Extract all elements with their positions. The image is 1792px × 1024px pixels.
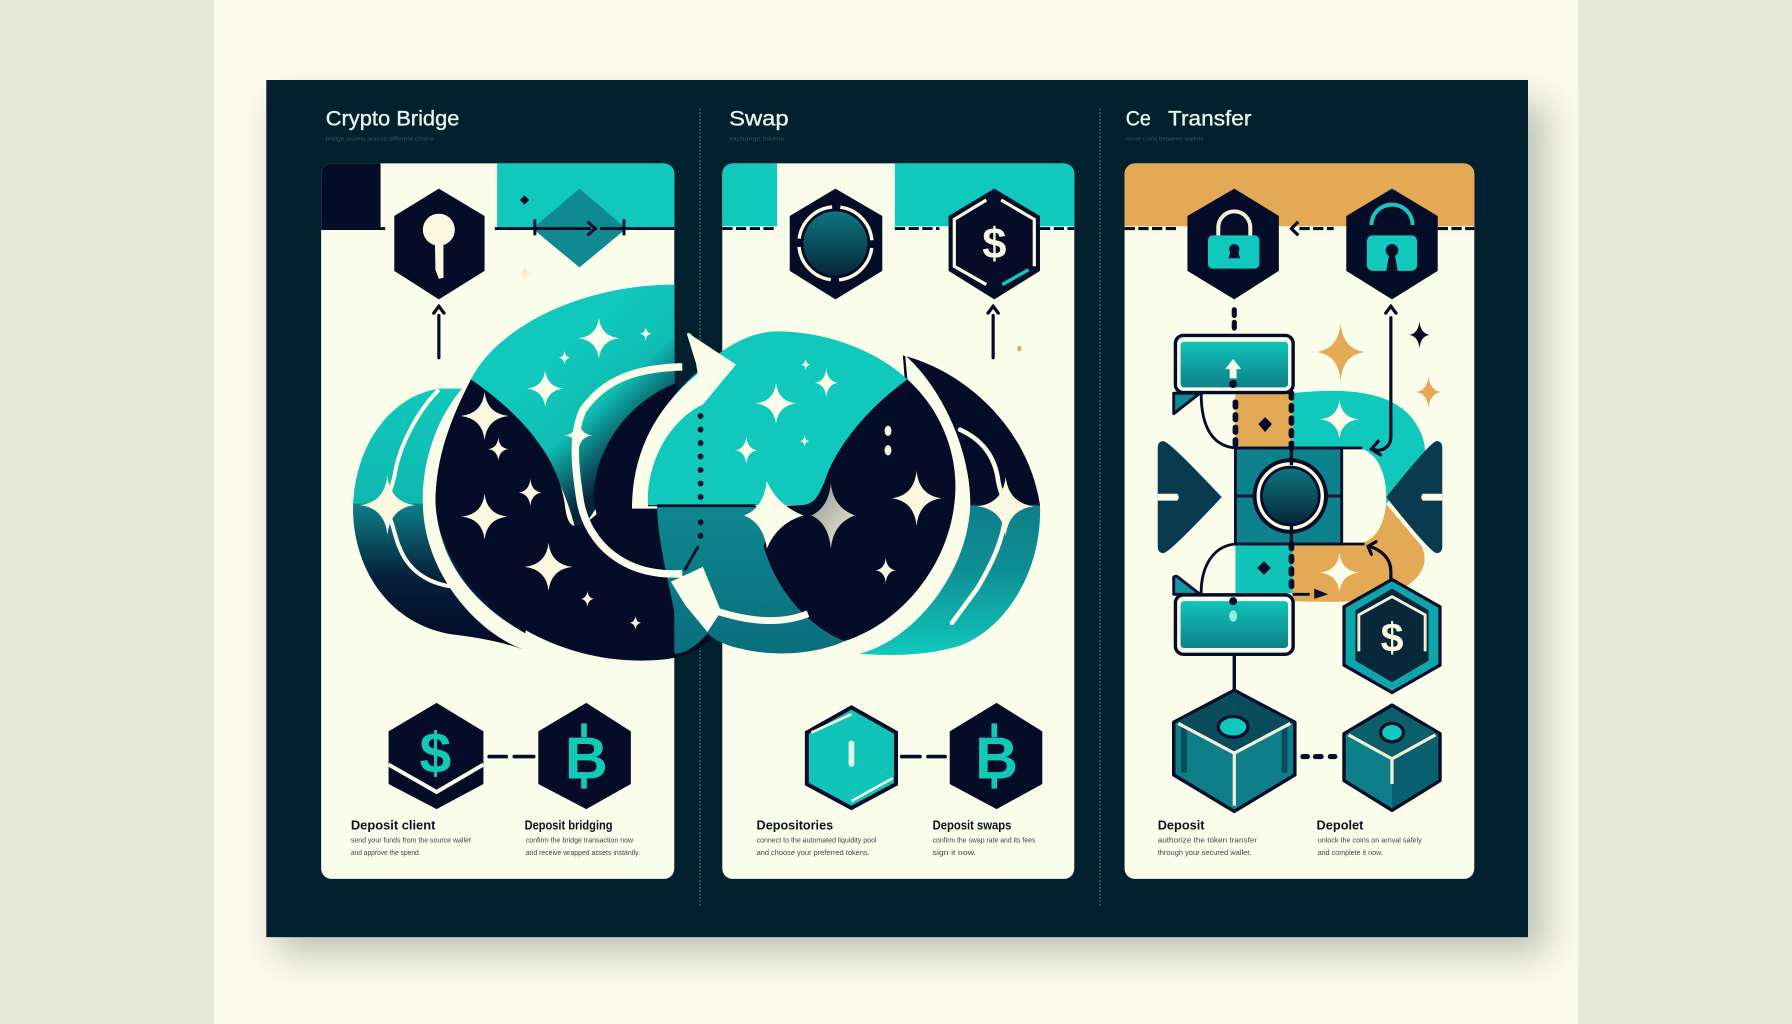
arrow up to key (434, 306, 444, 358)
connector dashes (489, 755, 534, 758)
label: right deposit: unlock the coins on arrival safely (1318, 835, 1422, 844)
heading: Coin Transfer: move coins between wallets (1126, 137, 1204, 143)
deep teal lower segment (657, 506, 845, 654)
icon: dollar hexagon: $ (420, 722, 451, 786)
label: right deposit: and receive wrapped assets instantly. (526, 848, 640, 857)
label: left deposit: and choose your preferred tokens. (757, 848, 870, 857)
teal top left block (722, 163, 777, 226)
central square with circle (1235, 448, 1365, 544)
faint star (518, 265, 531, 281)
dotted vertical links (1235, 393, 1291, 593)
icon: open lock hexagon (1346, 189, 1438, 299)
heading: Swap (729, 108, 789, 143)
panel: Transfer card (1125, 163, 1474, 879)
heading: Coin Transfer (1126, 108, 1251, 143)
label: left deposit: connect to the automated liquidity pool (757, 835, 877, 844)
curved return arrows (1368, 306, 1396, 592)
label: left deposit: Deposit (1158, 819, 1205, 833)
label: left deposit: and approve the spend. (351, 848, 421, 857)
label: right deposit: Deposit bridging (525, 819, 613, 833)
heading: Crypto Bridge: Crypto Bridge (326, 108, 459, 131)
tile sparkles and diamonds (1257, 400, 1359, 592)
outer left blob (353, 389, 537, 649)
icon: ring hexagon (790, 189, 882, 299)
panel: Crypto Bridge card (321, 163, 674, 879)
upper swap arrow (565, 333, 736, 574)
icon: bitcoin hexagon: B (565, 724, 608, 791)
icon: dollar hexagon (389, 703, 483, 809)
icon: bitcoin hexagon (950, 703, 1042, 809)
dark globe right (763, 379, 955, 641)
teal dome right (634, 331, 907, 505)
link through circle (1290, 448, 1293, 544)
dividing line and dots (657, 416, 755, 570)
lower teal box (1174, 544, 1328, 690)
left arrow triangle (1158, 441, 1222, 553)
heading: Swap: Swap (729, 108, 789, 131)
outer right blob (859, 355, 1040, 655)
label: right deposit (525, 819, 640, 857)
label: right deposit: Depolet (1317, 819, 1364, 833)
heading: Coin Transfer: Ce (1126, 108, 1151, 131)
label: right deposit: and complete it now. (1318, 848, 1383, 857)
label: left deposit (1158, 819, 1258, 857)
top teal dome (471, 285, 674, 537)
dashed line with arrow (1125, 222, 1474, 235)
panel: Swap card (722, 163, 1074, 879)
gold and navy stars (1317, 321, 1441, 408)
heading: Swap: exchange tokens (729, 137, 785, 143)
teal tile (1235, 545, 1293, 593)
sparkles on dark (360, 392, 1034, 630)
heading: Crypto Bridge (326, 108, 459, 143)
left white crescent (423, 379, 577, 656)
right white crescent (845, 355, 970, 654)
top teal box (1174, 335, 1293, 448)
icon: small cube (1344, 705, 1440, 810)
connector dots (1303, 754, 1335, 759)
icon: bitcoin hexagon (538, 703, 631, 809)
icon: closed lock hexagon (1187, 189, 1279, 299)
lower swap arrow (671, 567, 808, 632)
gold top band (1125, 163, 1474, 226)
heading: Crypto Bridge: bridge assets across different chains (326, 137, 435, 143)
label: left deposit (757, 819, 877, 857)
sparkles on teal (527, 318, 838, 464)
teal and gold circle (1291, 391, 1425, 602)
dots below lock (1232, 310, 1237, 328)
grey central star (811, 483, 855, 549)
label: right deposit: sign it now. (933, 848, 976, 857)
icon: key hexagon (394, 189, 485, 299)
dark main panel (266, 80, 1528, 937)
right arrow triangle (1386, 441, 1442, 553)
central bridge and swap illustration (353, 285, 1040, 661)
label: right deposit (1317, 819, 1422, 857)
label: left deposit: send your funds from the source wallet (351, 835, 471, 844)
right thin curve (952, 430, 1006, 623)
icon: dollar outline hexagon (949, 189, 1040, 299)
label: right deposit: confirm the swap rate and its fees (933, 835, 1036, 844)
heading: Coin Transfer: Transfer (1168, 108, 1251, 131)
left thin curve (385, 390, 450, 586)
icon: bitcoin hexagon: B (975, 724, 1018, 791)
label: right deposit (933, 819, 1036, 857)
label: right deposit: confirm the bridge transaction now (526, 835, 634, 844)
diamond with arrow (321, 189, 674, 267)
label: left deposit: Depositories (757, 819, 833, 833)
icon: teal hexagon (807, 707, 896, 808)
icon: dollar teal hexagon (1344, 579, 1440, 693)
dark top block (321, 163, 381, 227)
dark globe left (435, 379, 711, 661)
label: left deposit: authorize the token transfer (1158, 835, 1258, 844)
dashed line (722, 227, 1074, 230)
label: right deposit: Deposit swaps (933, 819, 1011, 833)
connector dashes (902, 755, 945, 758)
gold tile (1235, 393, 1293, 448)
teal top right block (895, 163, 1074, 226)
teal top block (497, 163, 674, 227)
icon: dollar outline hexagon: $ (982, 220, 1006, 268)
gold speck (1017, 346, 1022, 351)
label: left deposit: through your secured wallet. (1158, 848, 1251, 857)
icon: dollar teal hexagon: $ (1381, 614, 1404, 660)
icon: large cube (1174, 690, 1295, 811)
label: left deposit: Deposit client (351, 819, 436, 833)
large central star (744, 481, 803, 549)
label: left deposit (351, 819, 471, 857)
arrow up to dollar (988, 306, 998, 358)
